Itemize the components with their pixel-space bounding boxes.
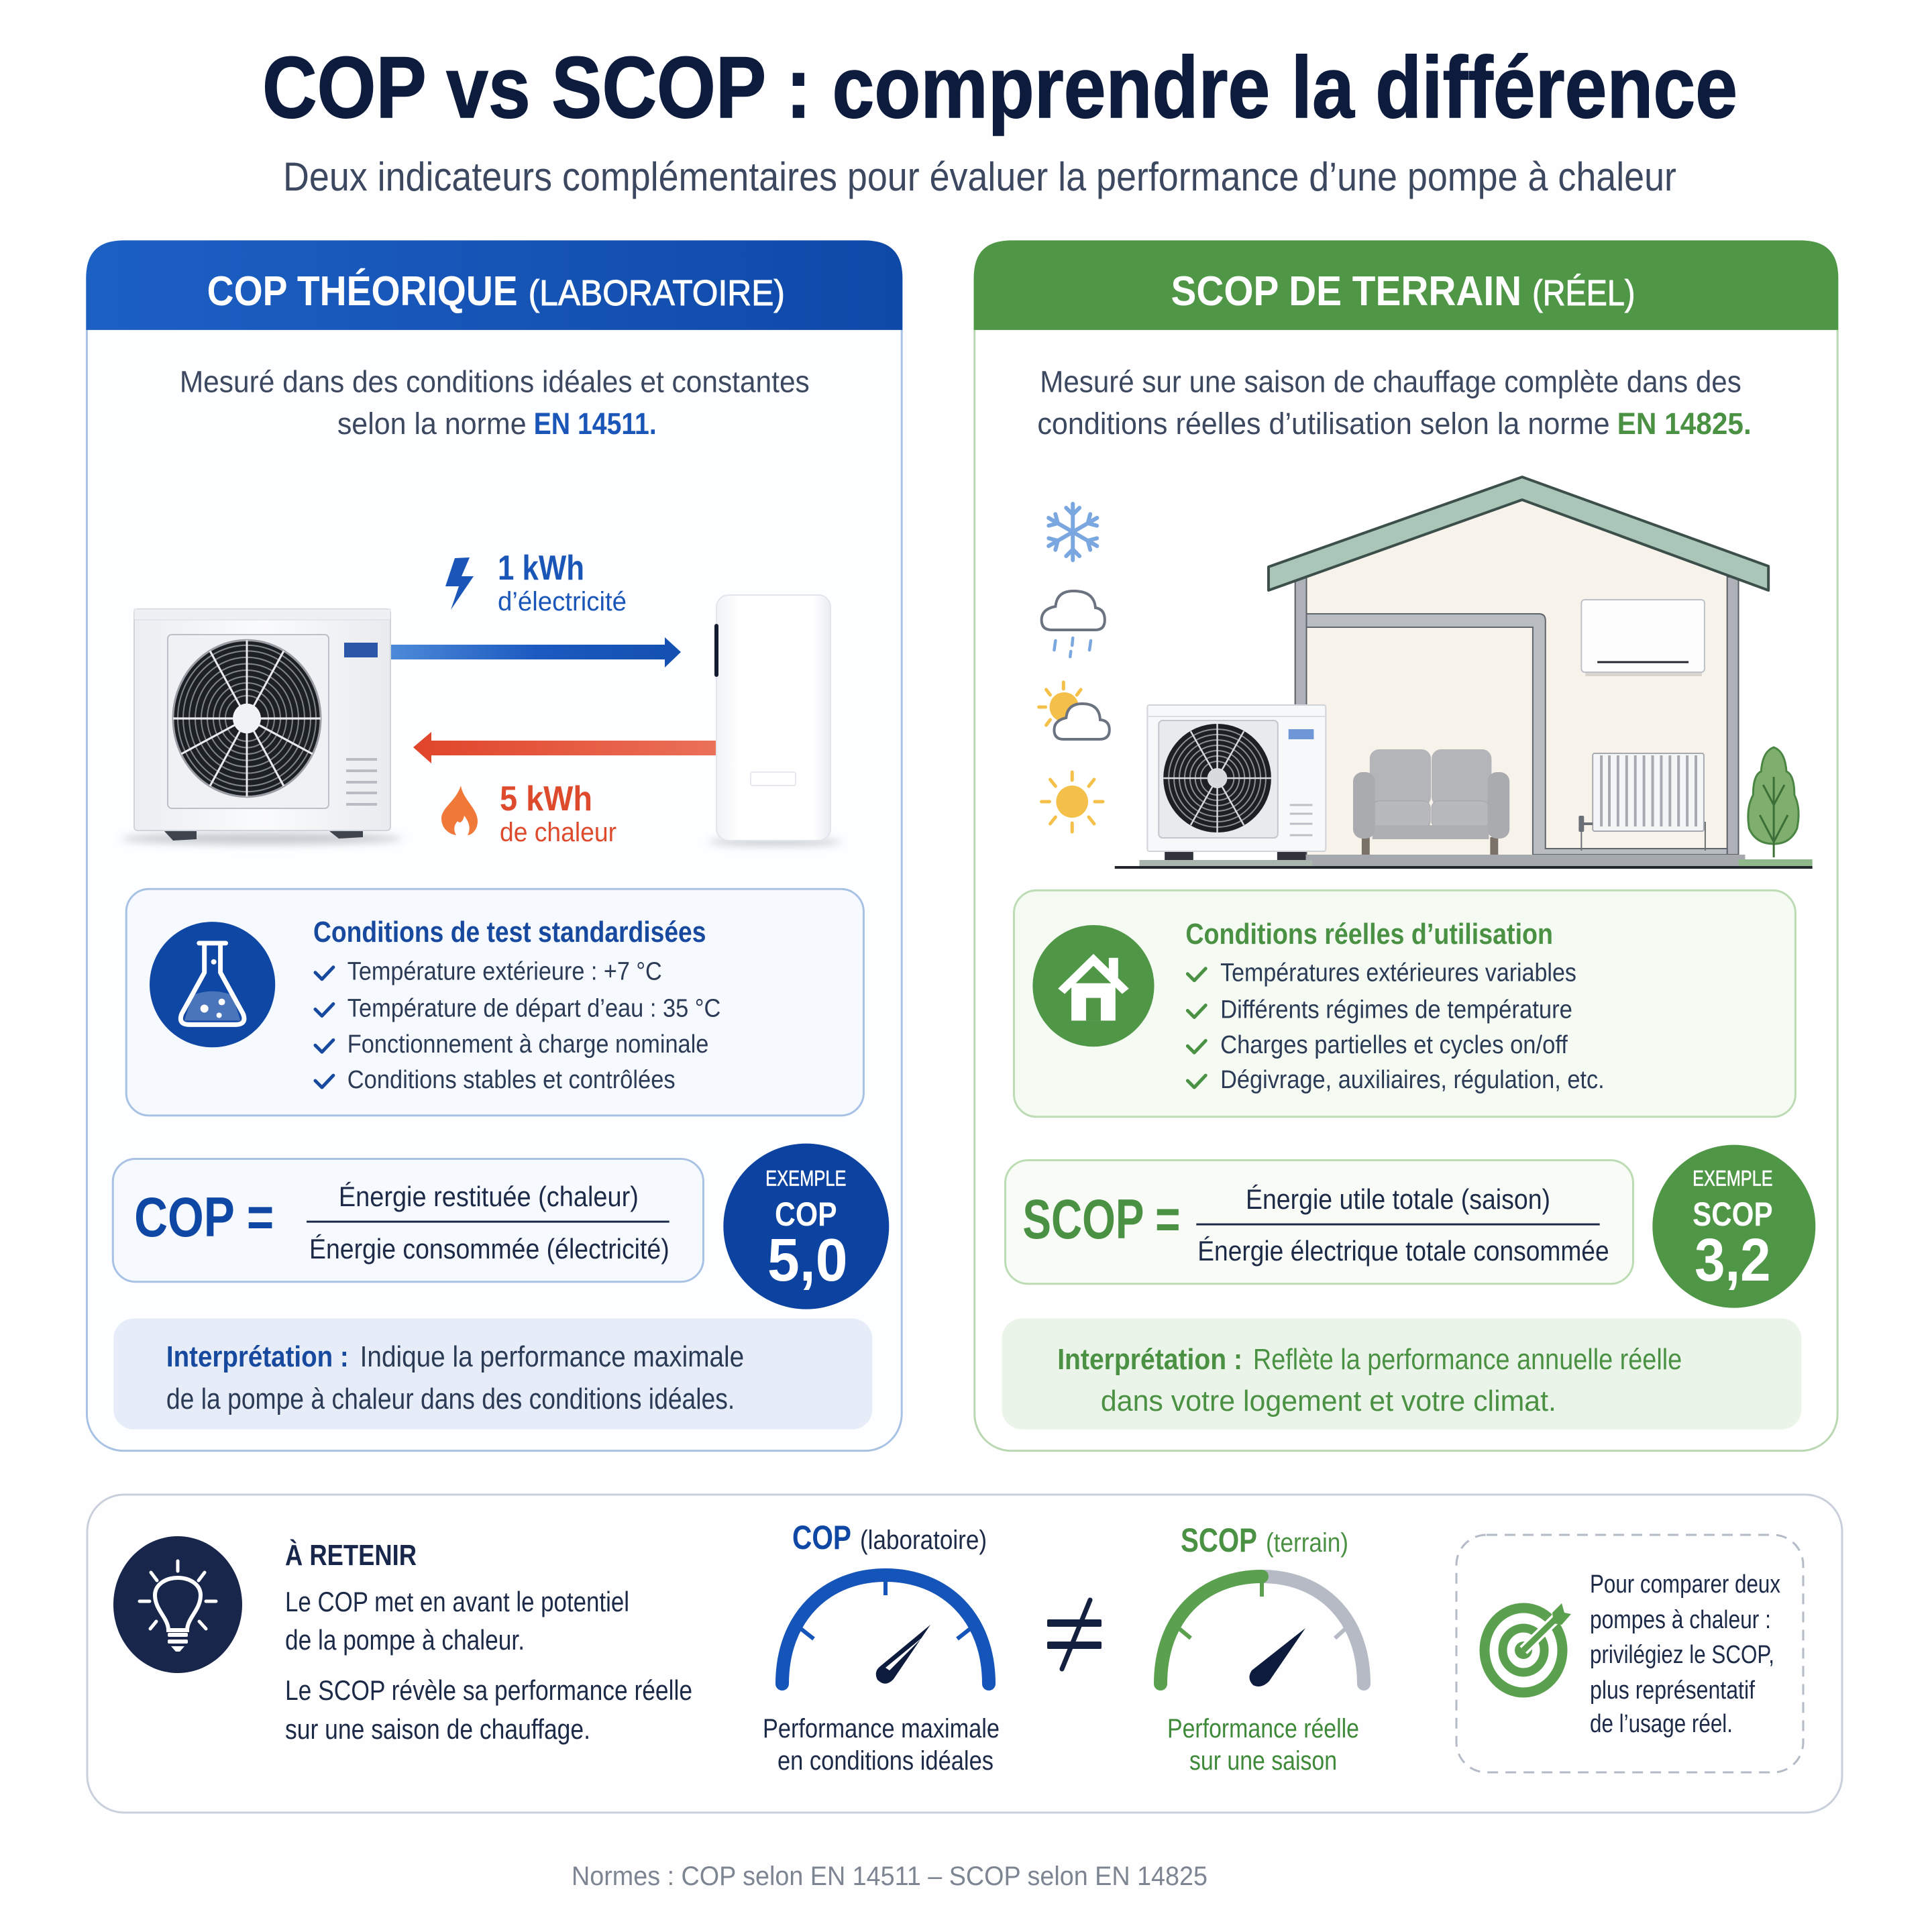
- interpretation: SCOP: Reflète la performance annuelle réelle: [1253, 1343, 1682, 1376]
- description: SCOP: EN 14825.: [1617, 407, 1752, 441]
- gauge: COP: Performance maximale: [763, 1714, 1000, 1743]
- fan small: [1163, 724, 1271, 833]
- label: heat: de chaleur: [500, 818, 616, 847]
- tree: [1748, 747, 1799, 857]
- formula: SCOP: Énergie électrique totale consommée: [1197, 1235, 1609, 1267]
- callout: compare: de l’usage réel.: [1590, 1710, 1733, 1738]
- gauge: COP: (laboratoire): [860, 1525, 987, 1555]
- sofa: [1353, 749, 1509, 855]
- description: COP: Mesuré dans des conditions idéales et constantes: [180, 364, 810, 398]
- arrow: electricity: [391, 637, 681, 667]
- key messages: de la pompe à chaleur.: [285, 1624, 525, 1656]
- key messages: [285, 1538, 692, 1745]
- house walls: [1295, 577, 1739, 855]
- formula: COP: Énergie consommée (électricité): [309, 1233, 669, 1265]
- checklist: test conditions: Fonctionnement à charge nominale: [347, 1030, 708, 1059]
- example badge: SCOP 3,2: EXEMPLE: [1693, 1165, 1773, 1190]
- key messages: Le SCOP révèle sa performance réelle: [285, 1674, 692, 1706]
- gauge: SCOP: sur une saison: [1189, 1746, 1337, 1776]
- panel header: COP: (LABORATOIRE): [529, 273, 785, 313]
- checklist: real conditions: [1187, 959, 1605, 1094]
- key messages: sur une saison de chauffage.: [285, 1713, 590, 1745]
- example badge: SCOP 3,2: 3,2: [1695, 1226, 1771, 1293]
- formula: SCOP: Énergie utile totale (saison): [1246, 1183, 1550, 1215]
- gauge: COP: en conditions idéales: [777, 1746, 994, 1776]
- icon: flame: [441, 786, 478, 835]
- not equal sign: [1047, 1600, 1102, 1669]
- callout: real conditions: Conditions réelles d’utilisation: [1185, 918, 1553, 951]
- icon: house: [1032, 925, 1155, 1046]
- key messages: Le COP met en avant le potentiel: [285, 1586, 629, 1617]
- description: COP: [180, 364, 810, 441]
- checklist: test conditions: Température extérieure : +7 °C: [347, 958, 662, 986]
- panel header: COP: COP THÉORIQUE: [207, 268, 518, 315]
- gauge: SCOP: Performance réelle: [1167, 1714, 1359, 1743]
- example badge: COP 5,0: 5,0: [767, 1226, 848, 1293]
- subtitle: Deux indicateurs complémentaires pour évaluer la performance d’une pompe à chaleur: [283, 154, 1676, 199]
- label: electricity: 1 kWh: [498, 549, 584, 588]
- house interior wall: [1307, 500, 1727, 855]
- formula: COP: [113, 1159, 703, 1282]
- panel header: SCOP: [974, 240, 1838, 330]
- interpretation: COP: Indique la performance maximale: [360, 1340, 744, 1373]
- title: COP vs SCOP : comprendre la différence: [262, 38, 1737, 136]
- interpretation: SCOP: [1002, 1319, 1801, 1430]
- formula: SCOP: SCOP =: [1022, 1187, 1180, 1250]
- illustration: house: [1115, 477, 1813, 869]
- icon: lightning: [445, 557, 474, 610]
- label: electricity: d’électricité: [498, 587, 627, 616]
- checklist: real conditions: Dégivrage, auxiliaires, régulation, etc.: [1220, 1066, 1605, 1094]
- icon: target: [1485, 1603, 1571, 1693]
- fan: [173, 640, 321, 797]
- gauge: SCOP: (terrain): [1266, 1528, 1348, 1558]
- checklist: test conditions: Température de départ d’eau : 35 °C: [347, 994, 720, 1022]
- checklist: test conditions: Conditions stables et contrôlées: [347, 1066, 676, 1094]
- checklist: real conditions: Températures extérieures variables: [1220, 959, 1576, 987]
- callout: test conditions: Conditions de test standardisées: [313, 916, 706, 949]
- arrow: heat: [413, 732, 716, 763]
- illustration: indoor unit: [708, 595, 842, 846]
- example badge: SCOP 3,2: SCOP: [1693, 1195, 1773, 1233]
- ground: [1115, 859, 1813, 869]
- radiator: [1578, 753, 1705, 851]
- illustration: outdoor unit: [121, 609, 402, 845]
- formula: COP: COP =: [134, 1185, 274, 1248]
- icon: light bulb: [113, 1536, 242, 1673]
- gauge: COP: [763, 1519, 1000, 1776]
- gauge: SCOP: SCOP: [1181, 1521, 1257, 1559]
- formula: COP: Énergie restituée (chaleur): [339, 1181, 639, 1212]
- checklist: real conditions: Charges partielles et cycles on/off: [1220, 1031, 1568, 1059]
- icon: sun and cloud: [1039, 682, 1110, 739]
- panel: à retenir: [87, 1495, 1842, 1813]
- gauge: COP: COP: [792, 1519, 851, 1556]
- interpretation: COP: Interprétation :: [166, 1340, 349, 1373]
- floor slab: [1306, 855, 1745, 866]
- callout: compare: privilégiez le SCOP,: [1590, 1641, 1774, 1669]
- description: SCOP: [1037, 364, 1752, 441]
- example badge: COP 5,0: EXEMPLE: [765, 1165, 847, 1190]
- label: heat: [441, 780, 616, 847]
- callout: compare: plus représentatif: [1590, 1676, 1755, 1705]
- panel: COP théorique: [86, 240, 902, 1451]
- outdoor unit in house: [1147, 705, 1326, 860]
- example badge: COP 5,0: [723, 1144, 889, 1309]
- description: COP: EN 14511.: [534, 407, 657, 441]
- callout: compare: pompes à chaleur :: [1590, 1606, 1771, 1634]
- duct: [1307, 614, 1727, 855]
- footer: standards: Normes : COP selon EN 14511 – SCOP selon EN 14825: [572, 1862, 1208, 1891]
- label: electricity: [445, 549, 627, 616]
- description: SCOP: Mesuré sur une saison de chauffage complète dans des: [1040, 364, 1741, 398]
- callout: compare: [1456, 1535, 1803, 1772]
- formula: SCOP: [1006, 1161, 1633, 1284]
- roof: [1269, 477, 1768, 590]
- indoor air unit: [1581, 600, 1705, 676]
- panel header: COP: [86, 240, 902, 330]
- interpretation: SCOP: Interprétation :: [1057, 1343, 1242, 1376]
- callout: test conditions: [126, 889, 863, 1116]
- icon: flask: [150, 922, 275, 1047]
- example badge: COP 5,0: COP: [775, 1195, 837, 1233]
- interpretation: SCOP: dans votre logement et votre climat.: [1101, 1385, 1556, 1417]
- panel header: SCOP: (RÉEL): [1532, 273, 1635, 313]
- icon: snowflake: [1045, 504, 1100, 560]
- icons: weather: [1039, 504, 1110, 832]
- checklist: real conditions: Différents régimes de température: [1220, 996, 1572, 1024]
- callout: real conditions: [1014, 890, 1795, 1117]
- label: heat: 5 kWh: [500, 780, 592, 818]
- icon: rain cloud: [1042, 591, 1105, 657]
- panel header: SCOP: SCOP DE TERRAIN: [1171, 268, 1521, 315]
- gauge: SCOP: [1161, 1521, 1364, 1776]
- checklist: test conditions: [315, 958, 720, 1094]
- icon: sun: [1042, 772, 1103, 832]
- callout: compare: Pour comparer deux: [1590, 1570, 1780, 1599]
- interpretation: COP: de la pompe à chaleur dans des conditions idéales.: [166, 1383, 735, 1415]
- panel: SCOP de terrain: [974, 240, 1838, 1451]
- description: SCOP: conditions réelles d’utilisation selon la norme: [1037, 407, 1610, 441]
- description: COP: selon la norme: [337, 407, 527, 441]
- key messages: À RETENIR: [285, 1538, 417, 1572]
- example badge: SCOP 3,2: [1652, 1145, 1815, 1308]
- interpretation: COP: [113, 1319, 872, 1430]
